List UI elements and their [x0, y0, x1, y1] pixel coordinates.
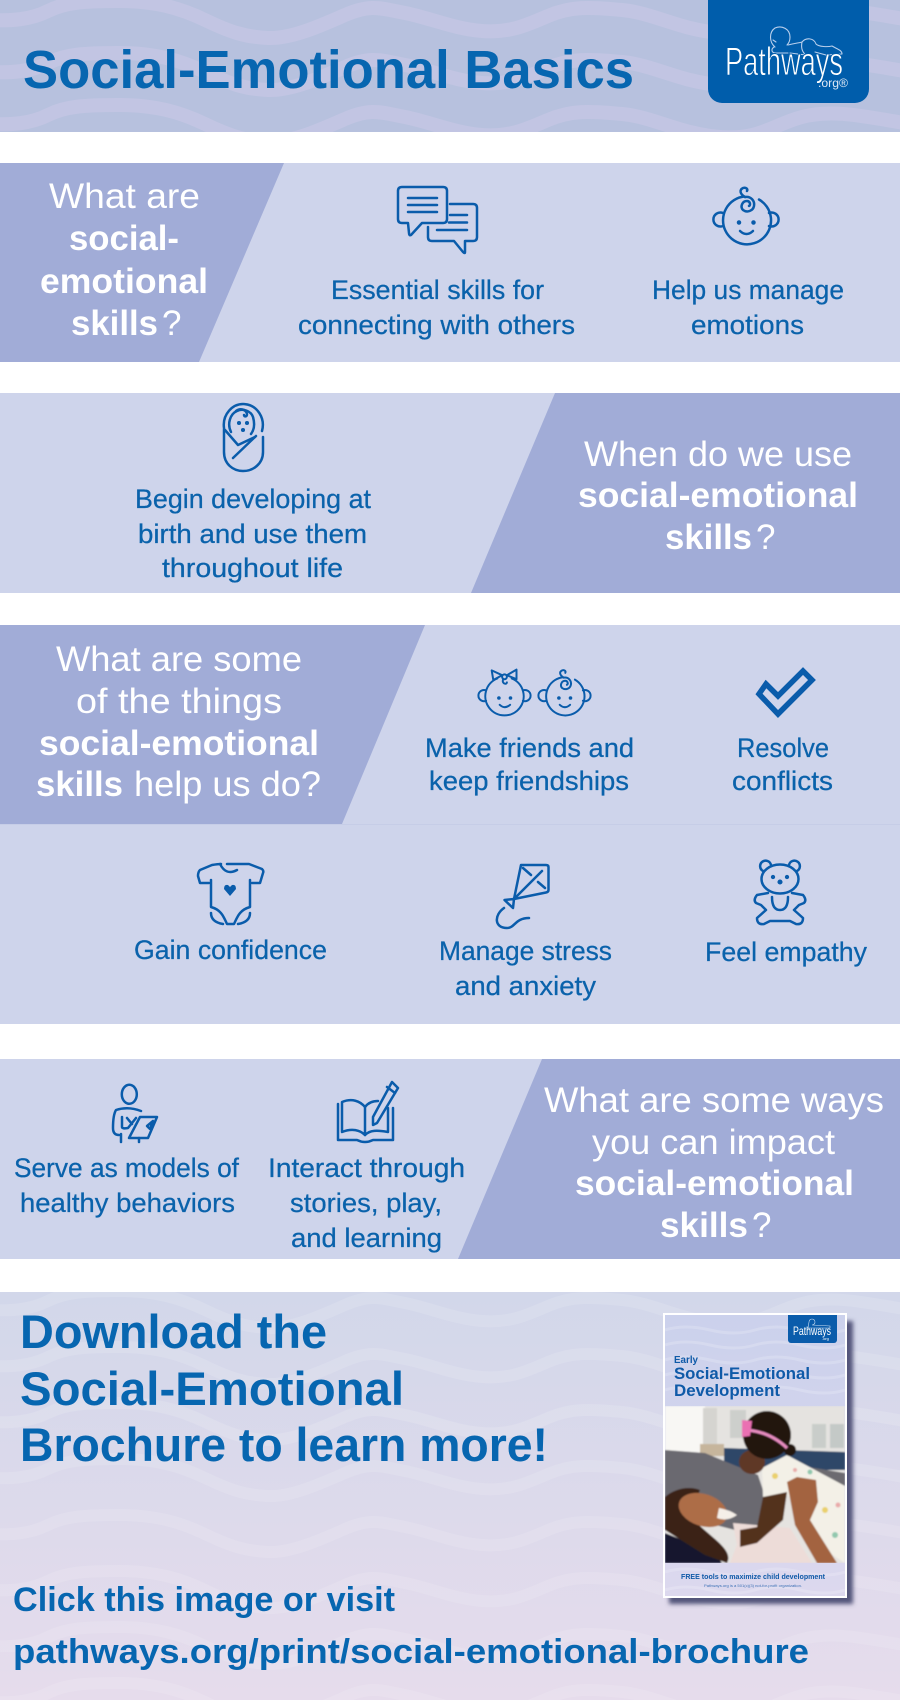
- heading: things skills help us do: [36, 640, 321, 804]
- text: make friends: [425, 733, 634, 796]
- icon: Pathways logo: .org®: [818, 76, 848, 90]
- text: help us manage emotions: emotions: [691, 310, 804, 340]
- heading: when do we use: social-emotional: [578, 476, 858, 515]
- text: serve as models: [14, 1153, 240, 1218]
- icon: swaddled baby: [224, 404, 263, 471]
- text: essential skills: connecting with others: [298, 310, 575, 340]
- icon: mini Pathways logo: Pathways: [793, 1324, 831, 1338]
- heading: ways you can impact: ?: [752, 1206, 771, 1245]
- text: essential skills: [298, 275, 575, 340]
- heading: ways you can impact: What are some ways: [544, 1081, 884, 1120]
- text: interact through: stories, play,: [290, 1188, 442, 1218]
- text: help us manage emotions: Help us manage: [652, 275, 844, 305]
- photo: mother lifting baby: [665, 1406, 845, 1563]
- heading: download the brochure: [20, 1305, 548, 1471]
- text: gain confidence: Gain confidence: [134, 935, 327, 965]
- title: Social-Emotional Basics: [23, 40, 634, 100]
- text: brochure tagline: Pathways.org is a 501(c)(3) not-for-profit organization.: [704, 1583, 802, 1588]
- heading: download the brochure: Social-Emotional: [20, 1362, 404, 1415]
- heading: what are social-emotional skills: skills: [71, 304, 158, 343]
- text: click this image: [13, 1581, 809, 1671]
- text: serve as models: healthy behaviors: [20, 1188, 235, 1218]
- heading: ways you can impact: [544, 1081, 884, 1245]
- heading: when do we use: skills: [665, 518, 752, 557]
- text: make friends: keep friendships: [429, 766, 629, 796]
- panel: when do we use skills: [0, 393, 900, 593]
- icon: teddy bear: [755, 861, 805, 924]
- text: resolve conflicts: [732, 733, 833, 796]
- text: brochure title: [674, 1355, 810, 1400]
- panel: header banner: [0, 0, 900, 142]
- heading: things skills help us do: of the things: [76, 682, 282, 721]
- text: feel empathy: Feel empathy: [705, 937, 868, 967]
- text: brochure title: Development: [674, 1381, 780, 1400]
- panel: ways to impact skills: [0, 1059, 900, 1259]
- text: brochure title: Early: [674, 1355, 698, 1366]
- heading: things skills help us do: skills: [36, 765, 123, 804]
- heading: what are social-emotional skills: social-: [69, 219, 179, 258]
- icon: mini Pathways logo: [788, 1315, 837, 1343]
- icon: girl and boy baby faces: [478, 670, 591, 715]
- heading: things skills help us do: What are some: [56, 640, 302, 679]
- text: click this image: pathways.org/print/social-emotional-brochure: [13, 1633, 809, 1671]
- heading: when do we use: [578, 435, 858, 557]
- text: help us manage emotions: [652, 275, 844, 340]
- heading: download the brochure: Brochure to learn more!: [20, 1418, 548, 1471]
- heading: ways you can impact: social-emotional: [575, 1164, 854, 1203]
- heading: when do we use: When do we use: [584, 435, 852, 474]
- text: resolve conflicts: conflicts: [732, 766, 833, 796]
- icon: mini Pathways logo: .org: [822, 1336, 829, 1341]
- panel: what skills help us do: [0, 625, 900, 1024]
- text: interact through: [268, 1153, 465, 1253]
- icon: baby bodysuit: [198, 864, 263, 924]
- heading: ways you can impact: you can impact: [592, 1123, 835, 1162]
- heading: things skills help us do: social-emotional: [39, 724, 319, 763]
- icon: Pathways logo: Pathways: [725, 40, 843, 84]
- heading: what are social-emotional skills: emotional: [40, 262, 208, 301]
- text: resolve conflicts: Resolve: [737, 733, 829, 763]
- icon: kite: [497, 865, 548, 928]
- text: serve as models: Serve as models of: [14, 1153, 240, 1183]
- text: manage stress: [439, 936, 612, 1001]
- text: brochure tagline: FREE tools to maximize child development: [681, 1574, 826, 1581]
- icon: Pathways logo: [708, 0, 869, 103]
- text: begin developing: Begin developing at: [135, 484, 372, 514]
- icon: check mark: [759, 671, 812, 714]
- icon: chat bubbles: [398, 187, 477, 253]
- panel: what are social-emotional skills: [0, 163, 900, 362]
- icon: person reading tablet: [113, 1085, 157, 1142]
- text: begin developing: [135, 484, 372, 583]
- text: begin developing: birth and use them: [138, 519, 367, 549]
- text: essential skills: Essential skills for: [331, 275, 544, 305]
- icon: book and pencil: [338, 1082, 398, 1142]
- text: manage stress: Manage stress: [439, 936, 612, 966]
- heading: download the brochure: Download the: [20, 1305, 327, 1358]
- text: brochure title: Social-Emotional: [674, 1364, 810, 1383]
- text: interact through: and learning: [291, 1223, 442, 1253]
- brochure cover: [663, 1313, 853, 1604]
- heading: when do we use: ?: [756, 518, 775, 557]
- text: begin developing: throughout life: [162, 553, 343, 583]
- text: make friends: Make friends and: [425, 733, 634, 763]
- text: manage stress: and anxiety: [455, 971, 597, 1001]
- text: interact through: Interact through: [268, 1153, 465, 1183]
- text: click this image: Click this image or visit: [13, 1581, 395, 1619]
- icon: baby face: [713, 188, 779, 244]
- heading: things skills help us do: help us do?: [134, 765, 321, 804]
- heading: what are social-emotional skills: [40, 177, 208, 343]
- text: brochure tagline: [681, 1574, 826, 1588]
- heading: what are social-emotional skills: ?: [162, 304, 181, 343]
- heading: what are social-emotional skills: What are: [49, 177, 200, 216]
- heading: ways you can impact: skills: [660, 1206, 748, 1245]
- panel: download footer: [0, 1291, 900, 1700]
